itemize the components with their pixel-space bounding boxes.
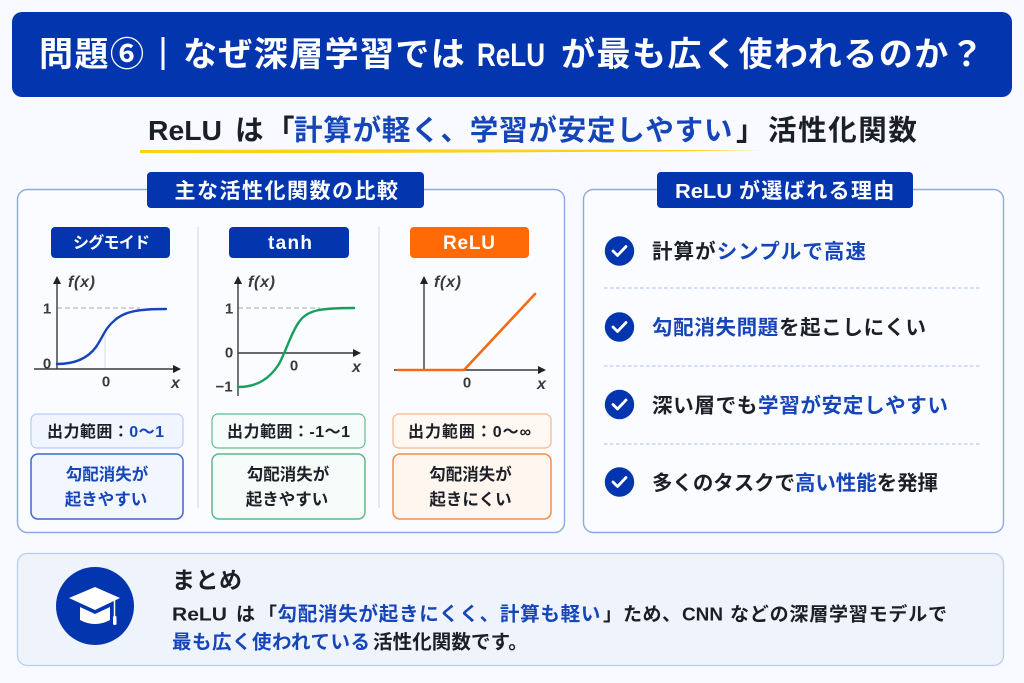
subtitle (140, 114, 919, 153)
sigmoid effect: 起きやすい (65, 490, 147, 509)
reason 2 (605, 312, 926, 342)
column: sigmoid (31, 227, 183, 519)
reason 3: 深い層でも学習が安定しやすい (652, 394, 948, 418)
tanh effect (212, 454, 365, 519)
subtitle: 「 (266, 115, 295, 147)
column: tanh (212, 227, 365, 519)
ReLU chart: f(x) (434, 274, 461, 291)
reason 4 (605, 467, 938, 497)
tanh chart: x (351, 359, 362, 376)
title banner (12, 12, 1012, 97)
ReLU chart (394, 274, 547, 393)
sigmoid chart: 1 (43, 300, 51, 318)
panel: reasons for choosing ReLU (584, 172, 1004, 532)
sigmoid effect: 勾配消失が (66, 464, 149, 484)
reasons heading: ReLU (675, 180, 732, 203)
reason 1 (605, 236, 866, 266)
subtitle: 活性化関数 (768, 115, 919, 147)
tanh chart: 1 (225, 300, 233, 318)
subtitle: 」 (736, 115, 765, 147)
summary text: CNN (682, 604, 723, 624)
ReLU effect: 勾配消失が (429, 464, 512, 484)
column: ReLU (393, 227, 551, 519)
reasons heading: が選ばれる理由 (739, 179, 896, 203)
summary heading: まとめ (172, 567, 242, 593)
ReLU chart: x (536, 376, 547, 393)
reason 3 (605, 390, 948, 419)
summary text: 活性化関数です。 (373, 632, 528, 654)
ReLU effect (393, 454, 551, 519)
subtitle: は (235, 115, 264, 147)
summary text: 勾配消失が起きにくく、計算も軽い (278, 602, 601, 626)
ReLU effect: 起きにくい (429, 490, 512, 509)
ReLU range: 出力範囲：0〜∞ (408, 422, 531, 441)
icon: graduation cap (56, 567, 134, 645)
tanh chart: −1 (215, 378, 233, 396)
reason 1: 計算がシンプルで高速 (652, 240, 866, 264)
tanh chart (215, 274, 362, 396)
tanh effect: 起きやすい (246, 490, 328, 509)
tanh chart: 0 (225, 344, 233, 362)
summary text (172, 602, 948, 654)
tanh effect: 勾配消失が (247, 464, 330, 484)
summary text: 最も広く使われている (172, 632, 370, 654)
sigmoid label (51, 227, 170, 258)
summary text: ため、 (623, 604, 682, 626)
summary text: 」 (603, 604, 622, 626)
panel heading: 主な活性化関数の比較 (174, 180, 400, 203)
sigmoid range: 出力範囲：0〜1 (47, 422, 164, 441)
ReLU label: ReLU (443, 233, 495, 254)
sigmoid chart (34, 274, 181, 392)
panel: activation function comparison (18, 172, 564, 532)
tanh range: 出力範囲：-1〜1 (227, 422, 350, 441)
subtitle: 計算が軽く、学習が安定しやすい (294, 114, 733, 147)
tanh chart: f(x) (248, 274, 275, 291)
summary text: 「 (258, 604, 277, 626)
ReLU range (393, 414, 551, 448)
sigmoid effect (31, 454, 183, 519)
subtitle: ReLU (148, 115, 222, 146)
ReLU chart: 0 (463, 374, 471, 392)
tanh chart: 0 (290, 358, 298, 374)
sigmoid chart: 0 (102, 374, 110, 390)
sigmoid chart: f(x) (68, 274, 95, 291)
title banner: が最も広く使われるのか？ (561, 35, 985, 74)
summary text: ReLU (172, 604, 227, 624)
summary text: などの深層学習モデルで (730, 602, 948, 626)
title banner: 問題⑥ (39, 36, 146, 74)
sigmoid label: シグモイド (73, 233, 150, 252)
reasons heading (657, 172, 913, 208)
reason 2: 勾配消失問題を起こしにくい (652, 316, 926, 340)
title banner: ReLU (477, 37, 545, 73)
panel: summary (18, 554, 1004, 666)
title banner: なぜ深層学習では (183, 36, 466, 74)
sigmoid chart: x (170, 375, 181, 392)
sigmoid range (31, 414, 183, 448)
sigmoid chart: 0 (43, 356, 51, 372)
ReLU label (410, 227, 529, 258)
panel heading (147, 172, 424, 208)
tanh label (229, 227, 349, 258)
tanh range (212, 414, 365, 448)
reason 4: 多くのタスクで高い性能を発揮 (652, 472, 938, 495)
tanh label: tanh (268, 233, 312, 254)
summary text: は (236, 604, 255, 626)
